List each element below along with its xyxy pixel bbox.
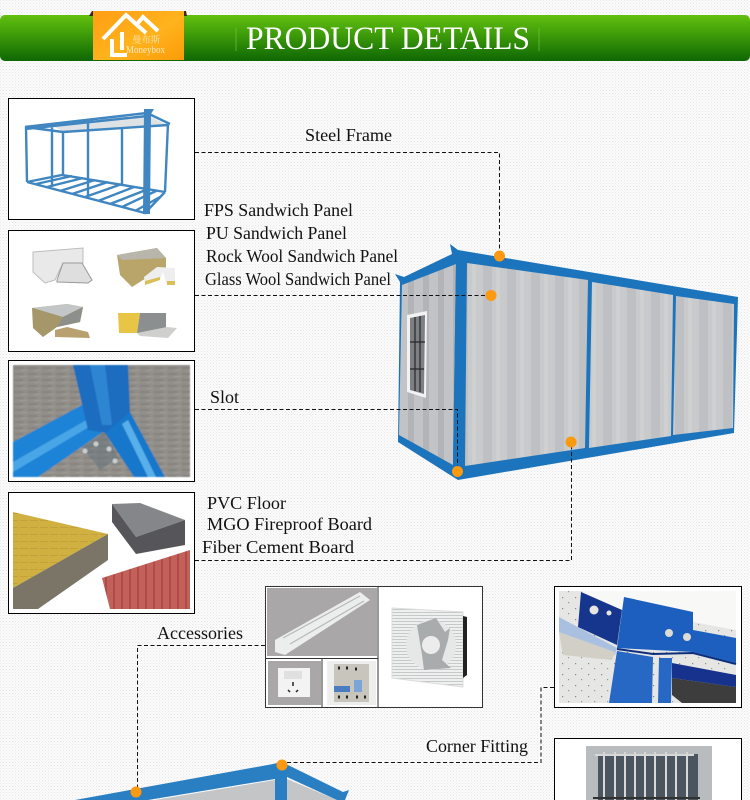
photo: sandwich panels	[8, 230, 194, 352]
sky	[580, 591, 736, 630]
corner post	[453, 261, 467, 466]
leader: floor	[195, 442, 572, 560]
photo: corner fitting	[554, 586, 742, 708]
circuit breaker	[327, 661, 376, 705]
leader: corner fitting	[283, 688, 554, 762]
red PVC floor	[102, 550, 190, 609]
front wall panel 1	[465, 263, 588, 466]
label: MGO fireproof board: MGO Fireproof Board	[207, 514, 372, 534]
yellow board	[13, 512, 108, 588]
container frame	[395, 244, 738, 480]
front wall panel 3	[673, 296, 734, 435]
orange marker dots	[130, 250, 576, 798]
fluorescent tube fixture	[267, 588, 377, 656]
window	[407, 311, 427, 398]
blue beam	[617, 597, 736, 663]
PU panel	[117, 248, 166, 287]
grey cement board	[112, 503, 185, 537]
photo: window grille	[554, 738, 742, 800]
leader: steel frame	[195, 152, 500, 256]
header banner	[0, 15, 750, 61]
label: accessories: Accessories	[157, 623, 243, 643]
title: PRODUCT DETAILS	[246, 21, 530, 57]
label: PU sandwich panel: PU Sandwich Panel	[206, 223, 347, 243]
glass wool panel	[118, 313, 140, 333]
logo latin name: Moneybox	[126, 45, 165, 56]
leader: accessories	[138, 646, 265, 792]
label: corner fitting: Corner Fitting	[426, 736, 528, 756]
white EPS panel	[33, 248, 83, 283]
label: PVC floor: PVC Floor	[207, 493, 286, 513]
dark bracket	[578, 592, 622, 645]
labels	[157, 125, 528, 756]
lower container walls	[155, 779, 337, 800]
wall socket	[268, 661, 321, 705]
label: fiber cement board: Fiber Cement Board	[202, 537, 354, 557]
logo: Moneybox	[89, 11, 187, 60]
rock wool panel	[32, 304, 83, 337]
label: glass wool sandwich panel: Glass Wool Sandwich Panel	[205, 269, 391, 289]
photo: accessories	[266, 586, 482, 708]
photo: slot joint	[8, 360, 194, 482]
photo: floor boards	[8, 492, 194, 614]
photo: steel frame	[8, 98, 194, 220]
bolts	[82, 432, 118, 470]
label: slot: Slot	[210, 387, 239, 407]
vertical post	[73, 365, 130, 433]
leader lines	[138, 152, 572, 792]
label: FPS sandwich panel: FPS Sandwich Panel	[204, 200, 353, 220]
right beam	[105, 412, 165, 477]
main container illustration	[395, 244, 738, 480]
green title bar	[0, 15, 750, 61]
logo chinese name: 曼布斯	[132, 34, 160, 46]
left wall	[399, 264, 456, 465]
lower container roof and frame	[75, 762, 349, 800]
ventilation fan	[392, 608, 467, 687]
front wall panel 2	[589, 282, 673, 448]
logo house icon	[103, 15, 158, 55]
left beam	[13, 405, 103, 477]
label: rock wool sandwich panel: Rock Wool Sandwich Panel	[206, 246, 398, 266]
eaves	[559, 617, 617, 655]
leader: sandwich panel	[195, 294, 491, 296]
leader: slot	[195, 410, 458, 471]
label: steel frame: Steel Frame	[305, 125, 392, 145]
lower container illustration	[75, 762, 349, 800]
title dividers	[236, 28, 539, 51]
